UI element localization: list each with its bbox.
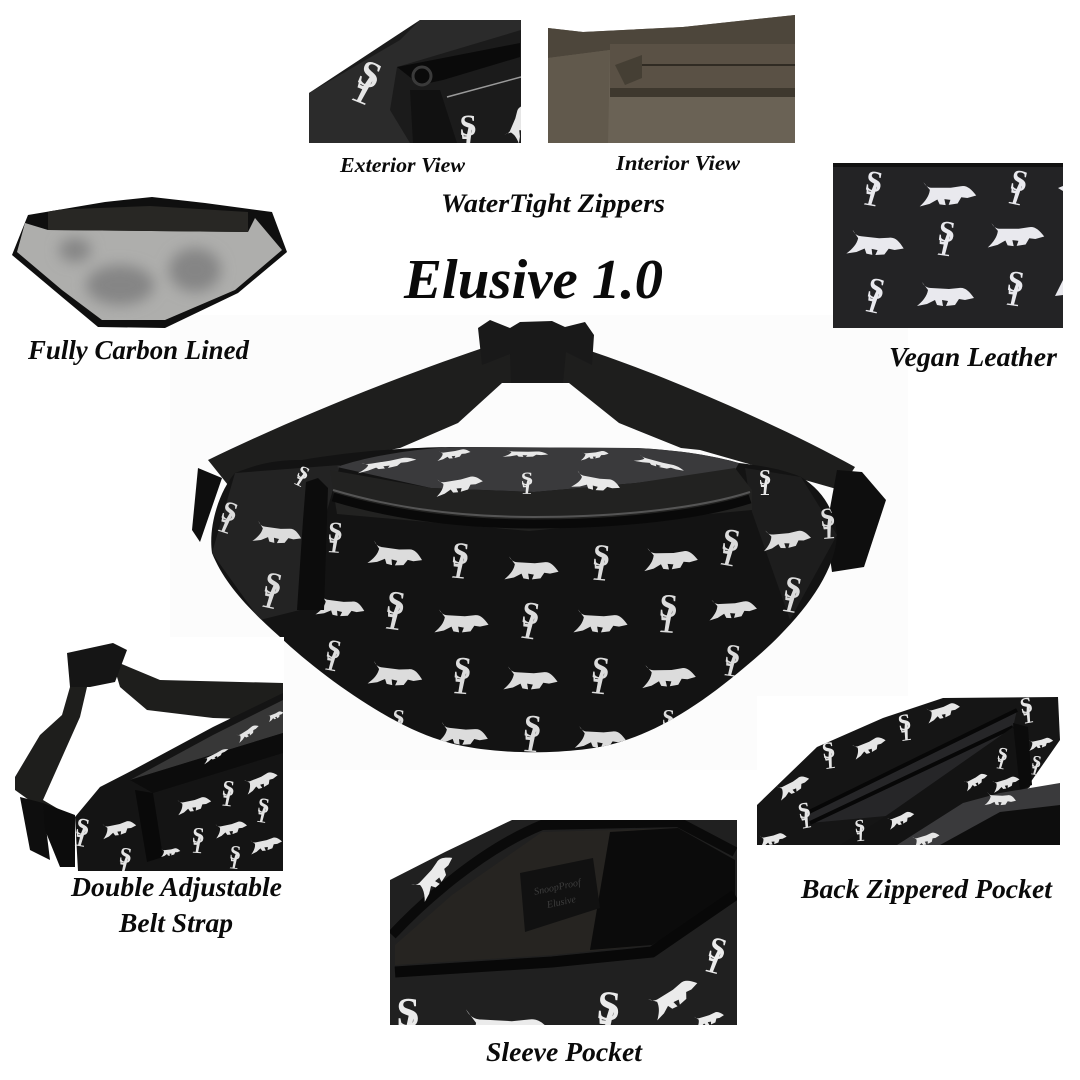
left strap slider (192, 468, 222, 542)
heading: watertight zippers: WaterTight Zippers (441, 189, 665, 218)
strap (208, 343, 855, 490)
pattern row 2 (262, 573, 282, 609)
label: vegan leather: Vegan Leather (889, 342, 1057, 372)
tag text: SnoopProof (533, 877, 583, 898)
label: double adjustable belt strap (70, 872, 282, 938)
photo: back zippered pocket (757, 692, 1060, 849)
photo: sleeve pocket (390, 820, 737, 1025)
main bag photo (192, 320, 886, 752)
label: back zippered pocket: Back Zippered Pocket (800, 874, 1054, 904)
tag text: Elusive (545, 894, 578, 911)
photo: carbon lined interior (12, 197, 288, 328)
bag side shading (212, 465, 340, 620)
tag text (534, 878, 581, 908)
zipper (333, 490, 750, 517)
background photo panel (170, 315, 908, 770)
pattern row 1 (218, 502, 238, 534)
top panel marks (358, 458, 416, 474)
label: exterior view: Exterior View (339, 153, 466, 177)
photo: double adjustable belt strap (8, 637, 285, 874)
zipper flap (330, 468, 752, 531)
zip pull (297, 478, 328, 610)
label: interior view: Interior View (615, 151, 741, 175)
pattern row 3 (325, 640, 340, 672)
buckle (478, 320, 594, 383)
label: double adjustable belt strap: Belt Strap (118, 908, 233, 938)
label: double adjustable belt strap: Double Adjustable (70, 872, 282, 902)
bag body (211, 447, 837, 752)
title: Elusive 1.0 (403, 249, 663, 311)
label: sleeve pocket: Sleeve Pocket (486, 1037, 644, 1067)
photo: exterior zipper view (309, 20, 521, 143)
top panel (337, 447, 739, 492)
photo: interior zipper view (548, 15, 795, 143)
label: fully carbon lined: Fully Carbon Lined (27, 335, 249, 365)
photo: vegan leather swatch (833, 163, 1063, 328)
pattern row 4 (394, 710, 404, 724)
right strap slider (826, 470, 886, 572)
